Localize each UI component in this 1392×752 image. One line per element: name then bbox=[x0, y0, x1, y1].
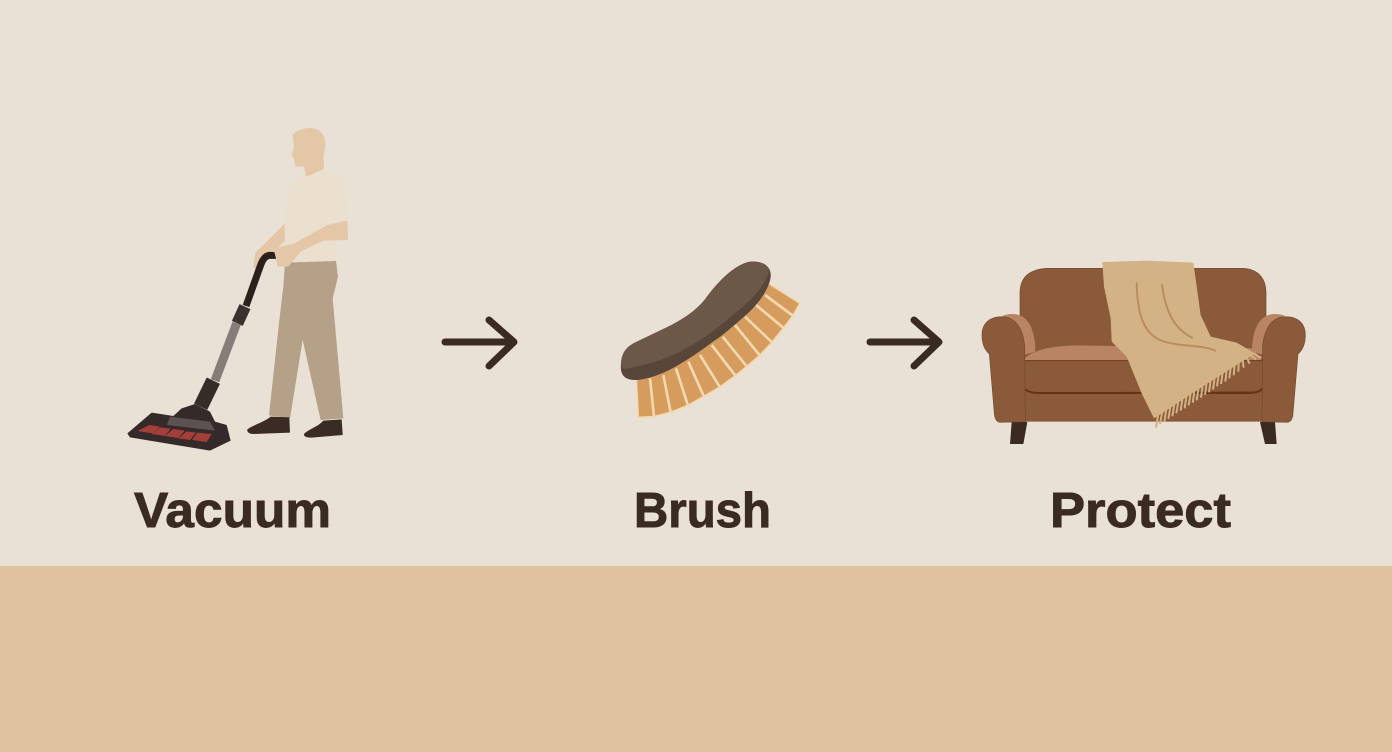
left arm bbox=[1003, 314, 1035, 355]
seat cushion bbox=[1023, 361, 1263, 393]
seat top bbox=[1023, 345, 1262, 361]
far arm bbox=[253, 223, 286, 273]
trousers bbox=[269, 261, 343, 420]
sofa base bbox=[1023, 390, 1263, 422]
floor band bbox=[0, 566, 1392, 752]
blanket bbox=[1102, 261, 1255, 418]
label: Vacuum: Vacuum bbox=[134, 484, 331, 538]
blanket fringe bbox=[1156, 353, 1261, 428]
right arm bbox=[1252, 314, 1284, 355]
icon: person vacuuming bbox=[127, 128, 348, 451]
sofa back bbox=[1020, 268, 1266, 363]
brush handle side bbox=[621, 262, 771, 380]
blanket folds bbox=[1137, 283, 1215, 351]
sofa legs bbox=[1010, 422, 1277, 444]
vacuum head bbox=[127, 404, 231, 451]
icon: brush bbox=[621, 262, 800, 417]
label: Brush: Brush bbox=[634, 484, 771, 538]
vacuum wand bbox=[201, 255, 279, 407]
shirt bbox=[285, 169, 348, 263]
arrow: vacuum to brush bbox=[445, 320, 514, 366]
brush handle top bbox=[621, 262, 769, 369]
icon: sofa with throw blanket bbox=[982, 261, 1305, 444]
near hand bbox=[273, 221, 348, 267]
arrow: brush to protect bbox=[870, 320, 939, 366]
bristles bbox=[636, 280, 800, 417]
shoes bbox=[247, 417, 290, 434]
label: Protect: Protect bbox=[1050, 484, 1231, 538]
head bbox=[292, 128, 325, 179]
